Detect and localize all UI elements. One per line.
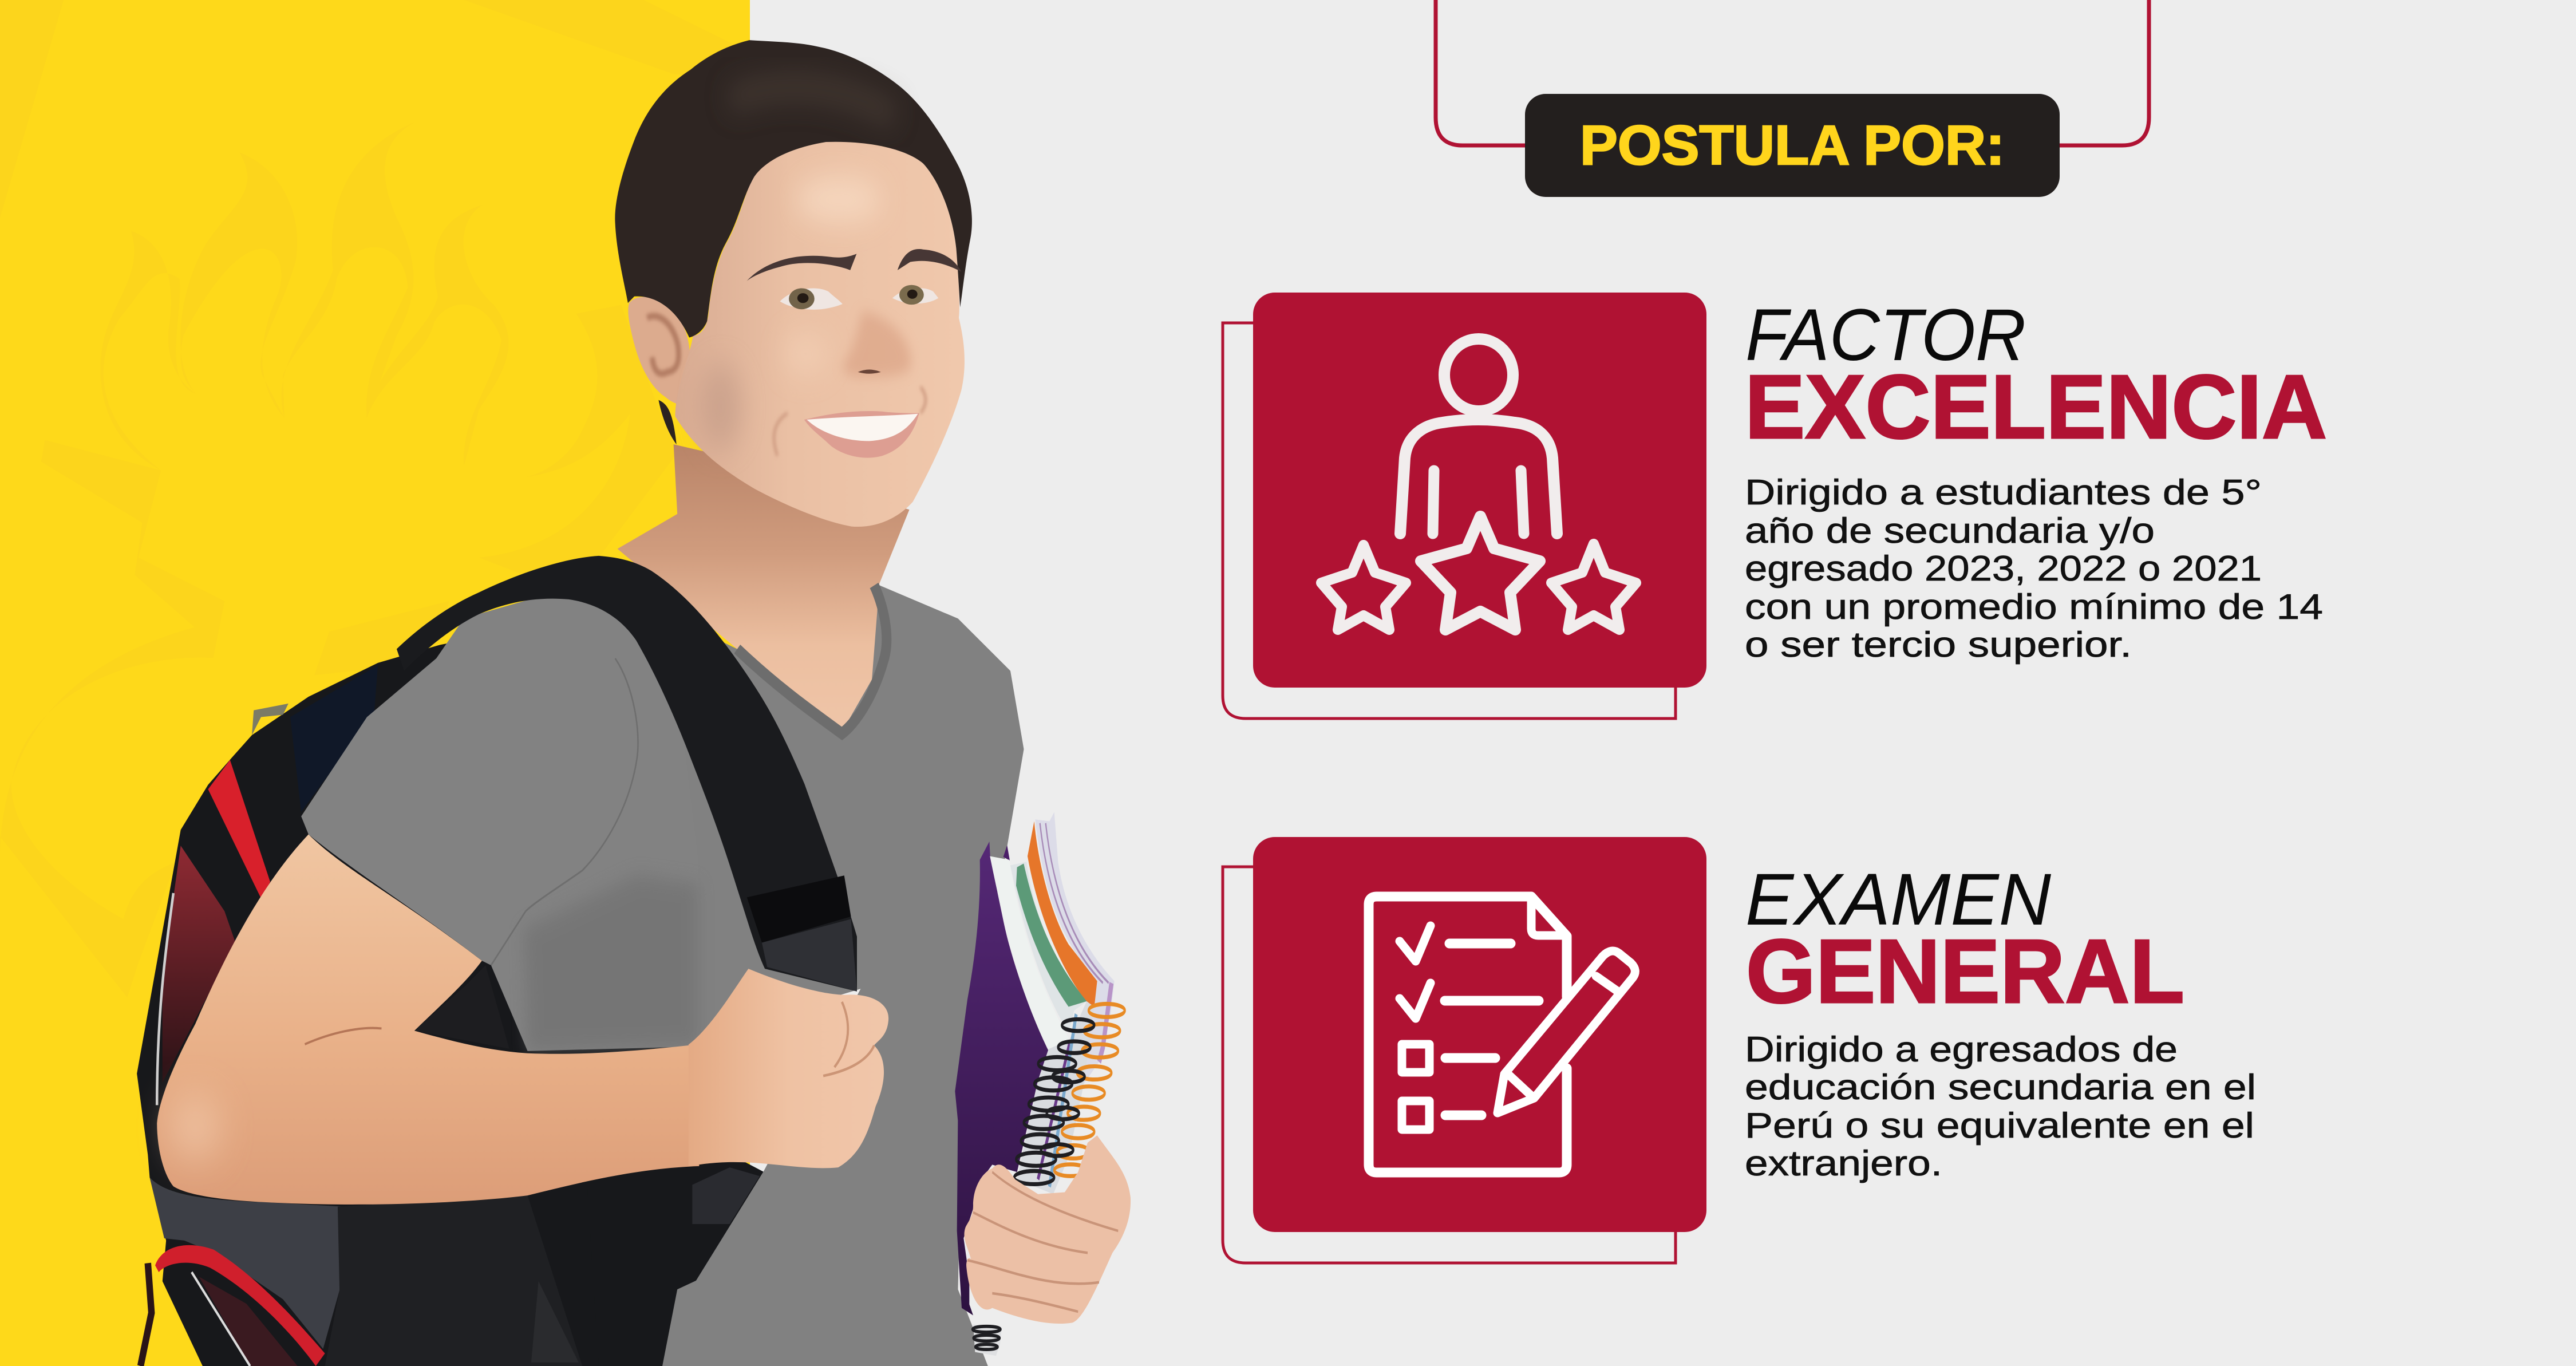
description: Dirigido a egresados de xyxy=(1745,1030,2178,1069)
nostril xyxy=(858,370,881,374)
lower hair xyxy=(658,400,677,444)
panel: yellow left block xyxy=(0,0,750,1366)
photo: student with backpack and notebooks xyxy=(137,40,1131,1366)
backpack red trim xyxy=(155,1245,325,1366)
nose shade xyxy=(841,311,911,377)
backpack mesh pocket xyxy=(325,1195,582,1366)
knuckle lines xyxy=(823,1002,874,1076)
hair sheen xyxy=(729,87,895,117)
neck xyxy=(618,444,909,732)
backpack lower piping xyxy=(192,1272,250,1366)
watermark: flame crest on yellow xyxy=(0,0,750,997)
icon: checklist with pencil xyxy=(1369,897,1635,1172)
card outline xyxy=(1223,867,1676,1263)
low notebook corner xyxy=(973,1325,1002,1356)
strap webbing band xyxy=(747,875,851,942)
backpack mesh highlight xyxy=(531,1281,579,1363)
badge text: POSTULA POR: xyxy=(1580,114,2005,176)
icon: person with three stars xyxy=(1321,339,1636,630)
description: egresado 2023, 2022 o 2021 xyxy=(1745,549,2262,589)
jaw shade xyxy=(701,364,742,449)
card outline xyxy=(1223,323,1676,718)
elbow highlight xyxy=(170,1096,221,1159)
red card xyxy=(1253,293,1706,688)
holding hand xyxy=(964,1135,1131,1324)
pupil left xyxy=(797,293,808,303)
face xyxy=(675,141,965,527)
ear xyxy=(628,297,692,405)
finger lines xyxy=(967,1172,1118,1312)
backpack lower right xyxy=(524,1045,764,1366)
second notebook pages xyxy=(1010,862,1086,1032)
notebooks in hand xyxy=(955,812,1131,1356)
backpack white piping xyxy=(157,893,173,1105)
teeth xyxy=(807,414,918,441)
purple cover xyxy=(955,842,1049,1315)
panel: examen general xyxy=(1223,837,2256,1263)
eyebrow right xyxy=(898,249,961,272)
heading: excelencia: EXCELENCIA xyxy=(1745,357,2327,457)
eyebrow left xyxy=(746,254,856,281)
orange cover xyxy=(1028,822,1097,1007)
description: educación secundaria en el xyxy=(1745,1068,2256,1107)
collar xyxy=(737,586,887,733)
cheek highlight xyxy=(783,334,828,374)
backpack gray pouch xyxy=(149,1178,345,1349)
description: extranjero. xyxy=(1745,1144,1942,1183)
orange notebook lines xyxy=(1040,823,1109,983)
backpack navy panel xyxy=(290,665,378,812)
red card xyxy=(1253,837,1706,1232)
green cover xyxy=(1016,863,1086,1007)
spine pages xyxy=(1017,1001,1095,1194)
badge: postula por xyxy=(1525,94,2060,197)
outline: top bracket xyxy=(1436,0,2149,145)
description: Dirigido a estudiantes de 5° xyxy=(1745,473,2262,512)
smile fold xyxy=(774,387,926,456)
orange notebook pages xyxy=(1035,812,1115,1084)
heading: examen: EXAMEN xyxy=(1745,859,2052,941)
front pages xyxy=(990,856,1069,1049)
description: año de secundaria y/o xyxy=(1745,511,2155,551)
underarm strap xyxy=(414,965,509,1049)
blue inner sheet line xyxy=(1049,1014,1076,1187)
sleeve seam xyxy=(491,658,638,965)
orange notebook purple band xyxy=(1099,983,1112,1062)
backpack red mesh xyxy=(163,846,235,1083)
description: Perú o su equivalente en el xyxy=(1745,1106,2254,1146)
description: con un promedio mínimo de 14 xyxy=(1745,587,2323,627)
backpack xyxy=(137,613,698,1366)
pupil right xyxy=(907,290,918,299)
description xyxy=(1745,1030,2256,1183)
heading: factor: FACTOR xyxy=(1745,294,2026,376)
panel: factor excelencia xyxy=(1223,293,2327,718)
description xyxy=(1745,473,2323,665)
shirt torso xyxy=(599,584,1024,1366)
iris left xyxy=(789,288,815,309)
description: o ser tercio superior. xyxy=(1745,625,2132,665)
backpack cord xyxy=(141,1263,152,1366)
iris right xyxy=(899,285,924,305)
lips xyxy=(804,411,919,458)
shirt sleeve xyxy=(301,582,698,1051)
black spirals xyxy=(1014,1019,1095,1184)
purple inner sheet line xyxy=(1038,1044,1069,1179)
backpack shoulder strap xyxy=(397,556,857,1224)
arm xyxy=(157,834,699,1205)
forehead highlight xyxy=(795,176,882,223)
hair xyxy=(615,40,972,338)
low spirals xyxy=(972,1326,1001,1349)
orange spirals xyxy=(1054,1004,1125,1176)
head xyxy=(615,40,972,527)
elbow crease xyxy=(305,1028,381,1044)
strap buckle xyxy=(692,1167,760,1224)
eye left xyxy=(780,288,843,310)
heading: general: GENERAL xyxy=(1746,921,2184,1022)
backpack red stripe xyxy=(208,760,270,900)
fist xyxy=(689,969,888,1168)
eye right xyxy=(892,288,938,303)
ear inner xyxy=(647,316,679,374)
torso shade xyxy=(524,875,698,1051)
backpack lower dark mesh xyxy=(199,1277,298,1366)
strap lower panel xyxy=(762,919,857,992)
purple peak xyxy=(1003,845,1010,860)
backpack top handle xyxy=(252,704,289,735)
